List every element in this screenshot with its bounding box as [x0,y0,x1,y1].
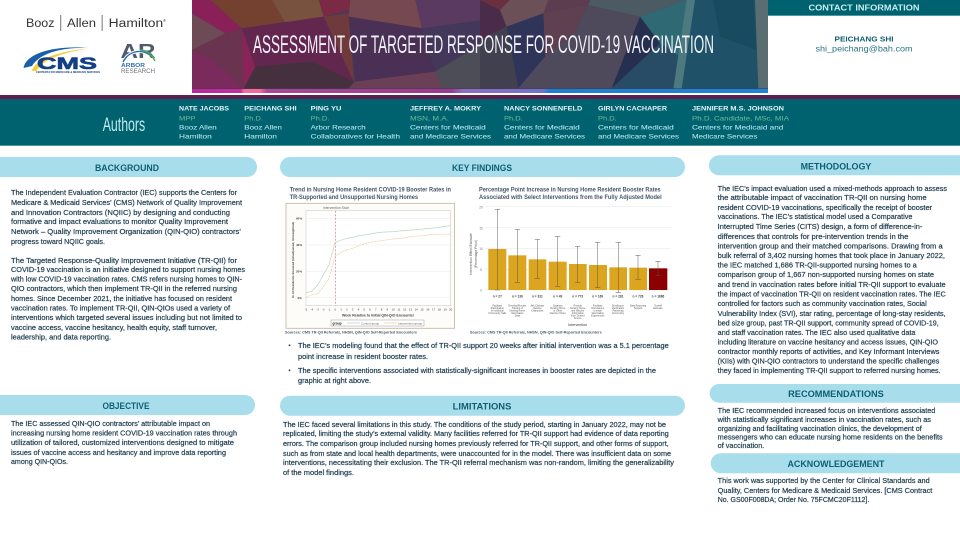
text: limitations: interventions, necessitating their exclusion. The TR-QII referral mechanism was non-random, limiting the generalizability [283,458,674,467]
axis labels: 6 [369,308,371,312]
text: methodology: The IEC’s impact evaluation used a mixed-methods approach to assess [718,184,947,193]
intervention category labels: to share [593,310,603,312]
author: Nancy Sonnenfeld: Ph.D. [504,116,523,122]
author: Jeffrey A. Mokry: and Medicare Services [410,134,492,140]
chart title: TR-Supported and Unsupported Nursing Homes [290,194,418,201]
heading: key findings [280,157,685,177]
intervention category labels: Data [515,314,520,318]
intervention category labels: Vaccination [511,312,524,315]
bar n labels: n = 49 [553,294,562,298]
text: recommendations: messengers who can educate nursing home residents on the benefits [718,432,943,442]
intervention category labels: Vaccination [612,307,625,310]
heading: recommendations [710,384,960,403]
text: methodology: the IEC matched 1,686 TR-QII-supported nursing homes to a [718,260,917,270]
intervention category labels: Develop/Provide [509,304,527,308]
text: background paragraph 1: progress toward NQIIC goals. [11,237,105,246]
heading: objective: OBJECTIVE [102,401,150,412]
text: background paragraph 2: homes. Since December 2021, the initiative has focused on resident [11,294,232,303]
panel: acknowledgement [711,453,960,504]
heading: methodology: METHODOLOGY [801,161,872,172]
bar n labels: n = 169 [592,294,603,298]
heading: objective [0,395,255,415]
y axis labels: 20 [479,206,483,210]
text: methodology: (KIIs) with QIN-QIO contractors to understand the specific challenges [718,356,940,366]
author: Jeffrey A. Mokry: Centers for Medicaid [410,124,486,132]
axis labels: 10 [391,308,395,312]
text: methodology: Vulnerability Index (SVI), star rating, percentage of long-stay residents, [718,309,946,318]
chart legend: Control group [361,321,380,325]
text: background paragraph 1: Network – Quality Improvement Organization (QIN-QIO) contractors’ [11,227,241,236]
text: recommendations: The IEC recommended increased focus on interventions associated [718,406,935,415]
axis labels: Intervention Start [323,206,349,210]
author: Peichang Shi: Hamilton [244,134,277,140]
source note: Sources: CMS TR-QII Referrals, NHSN, QIN-QIO Self-Reported Encounters [470,330,602,334]
intervention category labels: Overall [654,304,662,308]
intervention category labels: Information [572,312,584,315]
bar n labels: n = 281 [613,294,624,298]
text: limitations: replicated, limiting the study’s external validity. Many facilities referred for TR-QII support had evidence of data reporting [283,429,669,438]
text: methodology: the impact of vaccination TR-QII on resident vaccination rates. The IEC [718,290,946,298]
text: methodology: and trend in vaccination rates before initial TR-QII support to evaluate [718,280,946,289]
text: acknowledgement: This work was supported by the Center for Clinical Standards and [718,476,930,485]
logo: Booz Allen Hamilton: ® [163,18,166,23]
chart title [479,186,662,201]
axis labels: -4 [311,308,313,312]
y axis labels: 5 [480,268,482,272]
text: methodology: and staff vaccination rates. The IEC also used qualitative data [718,328,915,337]
logo: Arbor Research: RESEARCH [121,69,155,75]
text: limitations [283,420,674,477]
text: methodology: intervention group and their matched comparisons. Drawing from a [718,242,943,250]
bar chart: percentage point increase by intervention [469,186,671,334]
heading: acknowledgement [711,453,960,473]
findings bullet list [289,341,669,385]
author: Nancy Sonnenfeld: Centers for Medicaid [504,124,580,132]
axis labels: 19 [443,308,447,312]
heading: limitations [280,396,685,416]
axis labels: 12 [403,308,407,312]
intervention category labels: Vaccine [533,307,542,310]
intervention category labels: Training of [512,307,523,310]
author: Peichang Shi: PEICHANG SHI [244,106,297,112]
heading: background [0,157,257,177]
axis labels: 18 [438,308,441,312]
text: methodology: vaccinations. The IEC’s statistical model used a Comparative [718,212,912,221]
axis labels: -5 [305,308,308,312]
text: recommendations: organizing and facilitating vaccination clinics, the development of [718,424,922,433]
y axis labels: 10 [479,247,483,251]
intervention category labels: from Trusted [571,314,585,318]
findings bullet list: point increase in resident booster rates. [298,352,428,361]
author: Peichang Shi: Ph.D. [244,116,263,122]
text: methodology: resident COVID-19 vaccinations, specifically the receipt of booster [718,203,933,212]
logo: Arbor Research: AR [120,41,156,63]
findings bullet list: The IEC’s modeling found that the effect of TR-QII support 20 weeks after initial intervention was a 5.1 percentage [298,341,669,350]
bar n labels: n = 773 [572,294,583,298]
intervention category labels: Ask Clinician [530,304,545,308]
axis labels: 0 [334,308,336,312]
text: methodology: contractor monthly reports of activities, and Key Informant Interviews [718,347,940,356]
text: acknowledgement: No. GS00F008DA; Order No. 75FCMC20F1112]. [718,495,869,504]
text: background paragraph 2 [10,256,245,342]
author: Ping Yu: Ph.D. [311,116,330,122]
logo: Booz Allen Hamilton: Booz [26,18,55,30]
author: Ping Yu [311,106,400,140]
bar n labels: n = 1686 [652,294,665,298]
bar n labels: n = 136 [512,294,523,298]
title banner [192,0,768,93]
axis labels: -2 [322,308,325,312]
axis labels: 0% [298,296,302,300]
text: recommendations: of vaccination. [718,441,764,450]
axis labels: Week Relative to Initial QIN-QIO Encounter [342,314,415,318]
text: background paragraph 2: interventions which targeted several issues including but not limited to [11,313,242,322]
text: methodology: controlled for factors such as community vaccination rates, Social [718,299,927,308]
logo: Arbor Research [120,41,156,75]
intervention category labels: Experiences [591,314,605,318]
text: limitations: of the model findings. [283,468,354,477]
axis labels: 20% [296,270,302,274]
logo: Booz Allen Hamilton: Hamilton [109,18,163,30]
text: background paragraph 2: with low COVID-19 vaccination rates. CMS refers nursing homes to QIN- [10,274,243,284]
chart title: Trend in Nursing Home Resident COVID-19 Booster Rates in [290,186,451,193]
axis labels: 4 [358,308,360,312]
author: Jennifer M.S. Johnson: Medicare Services [692,134,758,140]
text: methodology: Interrupted Time Series (CITS) design, a form of difference-in- [718,222,923,231]
axis labels: -1 [328,308,331,312]
intervention category labels: Support [634,307,643,310]
axis labels: 17 [432,308,436,312]
author: Ping Yu: PING YU [311,106,341,112]
axis labels: 2 [346,308,348,312]
text: acknowledgement [718,476,932,504]
panel: limitations [280,396,685,477]
text: methodology: comparison group of 1,667 non-supported nursing homes on state [718,270,934,279]
text: background paragraph 1: and Innovation Contractors (NQIIC) by designing and conducting [11,208,230,217]
text: limitations: such as from state and local health departments, were unaccounted for in the model. There was insufficient data on some [283,449,671,458]
intervention category labels: and Vaccine [571,310,585,312]
author: Peichang Shi [244,106,297,140]
text: limitations: The IEC faced several limitations in this study. The conditions of the study period, starting in January 2022, may not be [283,420,666,429]
contact information panel [768,0,960,54]
y axis labels: 15 [479,226,483,230]
axis labels: 8 [381,308,383,312]
axis labels: 3 [352,308,354,312]
author: Nancy Sonnenfeld: NANCY SONNENFELD [504,106,582,112]
text: methodology: the attributable impact of vaccination TR-QII on nursing home [718,193,927,202]
intervention category labels: Community [612,312,625,315]
axis labels: 7 [375,308,377,312]
author: Nancy Sonnenfeld: and Medicare Services [504,134,586,140]
author: Jeffrey A. Mokry: MSN, M.A. [410,116,449,122]
author: Nate Jacobs: Booz Allen [179,124,217,132]
author: Ping Yu: Arbor Research [311,124,366,132]
line: intervention group [306,234,451,298]
text: background paragraph 2: vaccine access, vaccine hesitancy, health equity, staff turnover, [11,323,217,332]
text: objective: The IEC assessed QIN-QIO contractors’ attributable impact on [11,419,210,428]
intervention category labels: or Other [553,310,562,312]
author: Girlyn Cachaper: Centers for Medicaid [598,124,674,132]
axis labels: % of Residents Boosted (Unadjusted, Unweighted) [291,222,295,298]
author: Girlyn Cachaper: Ph.D. [598,116,617,122]
intervention category labels: Vaccination [592,312,604,315]
bars [488,249,667,290]
axis labels: 60% [296,216,302,220]
axis labels [291,206,453,318]
author: Nate Jacobs: MPP [179,116,196,122]
text: objective: among QIN-QIOs. [11,457,68,466]
intervention category labels: Discussions [591,307,605,310]
text: acknowledgement: Quality, Centers for Medicare & Medicaid Services. [CMS Contract [718,486,932,495]
intervention category labels: Vaccine Clinics [550,312,567,315]
panel: key findings [280,157,685,385]
chart legend: Intervention group [398,321,423,325]
header: logos [24,15,166,75]
text: background paragraph 2: leadership, and data reporting. [11,332,111,342]
axis labels: 13 [409,308,412,312]
author: Jeffrey A. Mokry: JEFFREY A. MOKRY [410,106,481,112]
axis labels: 16 [426,308,430,312]
author: Nate Jacobs: Hamilton [179,134,212,140]
logo: CMS: CMS [37,54,97,73]
text: methodology: including literature on vaccine hesitancy and access issues, QIN-QIO [718,338,938,346]
heading: acknowledgement: ACKNOWLEDGEMENT [788,459,885,470]
text: background paragraph 1: formative and impact evaluations to monitor Quality Improvement [11,217,228,226]
author: Ping Yu: Collaboratives for Health [311,134,400,140]
chart title: Percentage Point Increase in Nursing Home Resident Booster Rates [479,186,661,193]
bar n labels [493,294,665,298]
logo: CMS [24,47,100,74]
heading: limitations: LIMITATIONS [453,402,511,413]
intervention category labels: Facilitate [593,304,603,308]
chart legend [331,320,424,326]
text: objective: issues of vaccine access and hesitancy and improve data reporting [11,448,226,457]
axis labels: 9 [386,308,388,312]
text: background paragraph 2: QIO contractors, which then implement TR-QII in the referred nursing [11,284,237,293]
author: Jennifer M.S. Johnson [692,106,790,140]
text: methodology: differences that controls for pre-intervention trends in the [718,232,908,241]
intervention category labels: Organize [553,304,563,308]
axis labels: 1 [340,308,342,312]
text: methodology: they faced in implementing TR-QII support to referred nursing homes. [718,366,941,375]
logo: Booz Allen Hamilton [26,15,166,31]
author: Jeffrey A. Mokry [410,106,492,140]
intervention category labels: Intervention [568,323,587,327]
text: methodology: bed size group, past TR-QII support, community spread of COVID-19, [718,318,939,328]
y axis labels: Intervention Effect Estimate [469,233,473,275]
intervention category labels: Source [574,317,582,320]
findings bullet list: The specific interventions associated with statistically-significant increases in booster rates are depicted in the [298,366,656,375]
author: Nate Jacobs: NATE JACOBS [179,106,229,112]
text: objective [11,419,237,466]
contact information panel: CONTACT INFORMATION [808,2,920,12]
intervention category labels: Enrolling in [612,304,625,308]
line: control group [306,226,451,293]
axis labels: 15 [420,308,424,312]
source note: Sources: CMS TR-QII Referrals, NHSN, QIN-QIO Self-Reported Encounters [285,330,417,334]
panel: objective [0,395,255,466]
text: limitations: errors. The comparison group included nursing homes previously referred for TR-QII support, and other forms of support, [283,439,669,448]
intervention category labels: Nursing Home [550,307,566,310]
text: recommendations [717,406,943,450]
axis labels: 5 [363,308,365,312]
logo: CMS: CENTERS FOR MEDICARE & MEDICAID SERVICES [36,70,100,74]
logo: Booz Allen Hamilton: Allen [67,18,96,30]
text: objective: increasing nursing home resident COVID-19 vaccination rates through [11,428,237,438]
author: Peichang Shi: Booz Allen [244,124,282,132]
intervention category labels: Provide [574,304,582,308]
intervention category labels: Participation [491,307,505,310]
author: Girlyn Cachaper [598,106,680,140]
bar n labels: n = 27 [493,294,502,298]
axis labels: 20 [449,308,453,312]
text: background paragraph 2: vaccination rates. To implement TR-QII, QIN-QIOs used a variety of [11,304,230,312]
authors heading: Authors [103,115,145,136]
axis labels: 11 [397,308,401,312]
chart title: Associated with Select Interventions from the Fully Adjusted Model [479,194,662,201]
text: background paragraph 1: Medicare & Medicaid Services’ (CMS) Network of Quality Improvement [11,198,242,207]
intervention category labels: Partnering [612,310,624,312]
contact information panel: shi_peichang@bah.com [816,44,913,54]
author: Girlyn Cachaper: and Medicare Services [598,134,680,140]
text: methodology [718,184,947,375]
logo: Arbor Research: ARBOR [121,63,145,69]
intervention category labels: Nursing Home [570,307,586,310]
bar n labels: n = 331 [532,294,543,298]
intervention category labels: Facilitate [493,304,503,308]
text: background paragraph 2: COVID-19 vaccination is an initiative designed to support nursing homes [11,265,245,274]
intervention category labels: Data Reporting [630,304,647,308]
chart legend: group [332,321,342,325]
heading: key findings: KEY FINDINGS [452,163,512,174]
author: Nancy Sonnenfeld [504,106,586,140]
text: background paragraph 1 [11,188,242,246]
panel: recommendations [710,384,960,450]
text: recommendations: with statistically significant increases in vaccination rates, such as [717,415,931,424]
intervention category labels: Champions [531,310,544,312]
contact information panel: PEICHANG SHI [834,34,894,44]
intervention category labels: in Individual [491,310,504,312]
axis labels: 40% [296,243,302,247]
author: Girlyn Cachaper: GIRLYN CACHAPER [598,106,667,112]
text: methodology: bulk referral of 3,402 nursing homes that took place in January 2022, [718,251,945,260]
text: background paragraph 1: The Independent Evaluation Contractor (IEC) supports the Centers for [11,188,238,197]
author: Nate Jacobs [179,106,229,140]
text: background paragraph 2: The Targeted Response-Quality Improvement Initiative (TR-QII) for [11,256,238,265]
bar n labels: n = 726 [633,294,644,298]
heading: recommendations: RECOMMENDATIONS [788,389,884,400]
intervention category labels: Estimate [653,307,663,310]
heading: methodology [709,155,960,175]
author: Jennifer M.S. Johnson: Ph.D. Candidate, MSc, MIA [692,116,790,122]
y axis labels [469,206,483,292]
line chart: booster rate trend [285,186,454,334]
intervention category labels [488,304,663,327]
axis labels: -3 [316,308,319,312]
author: Jennifer M.S. Johnson: JENNIFER M.S. JOHNSON [692,106,784,112]
text: objective: utilization of tailored, customized interventions designed to mitigate [11,438,234,447]
error bars [495,209,661,293]
intervention category labels: Community Calls [488,312,507,315]
chart title [290,186,451,201]
panel: background [0,157,257,342]
author: Jennifer M.S. Johnson: Centers for Medicaid and [692,124,784,132]
authors band [0,95,960,146]
axis labels: 14 [415,308,418,312]
y axis labels: (Percentage Point) [474,240,478,268]
panel: methodology [709,155,960,375]
y axis labels: 0 [480,288,482,292]
findings bullet list: graphic at right above. [298,376,371,385]
heading: background: BACKGROUND [95,163,159,174]
intervention category labels: Nursing Home [510,310,526,312]
